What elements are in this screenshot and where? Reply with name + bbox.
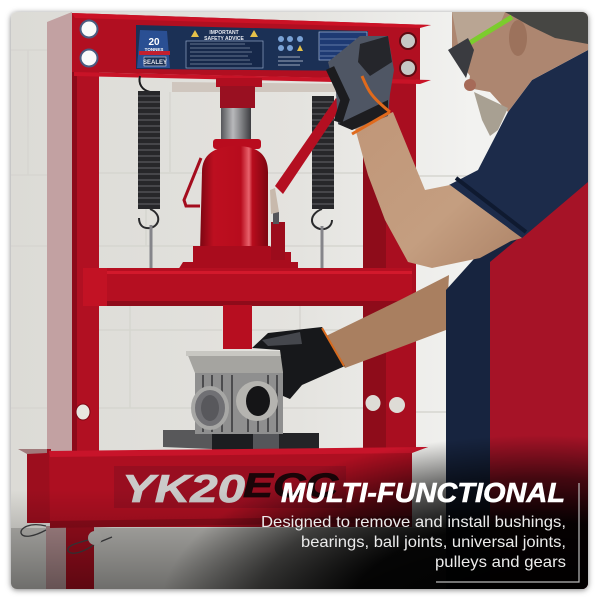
workpiece base blocks bbox=[163, 430, 319, 451]
press ram lower bbox=[223, 305, 252, 349]
left spring bbox=[138, 76, 160, 272]
retaining pins bbox=[21, 525, 112, 553]
safety label panel: 20 bbox=[148, 37, 160, 48]
caption body text: Designed to remove and install bushings, bbox=[261, 514, 566, 531]
caption bracket line bbox=[436, 483, 579, 582]
safety label panel: SEALEY bbox=[143, 60, 167, 66]
caption body text bbox=[261, 514, 566, 571]
model decal: YK20 bbox=[122, 468, 245, 511]
engine cylinder workpiece bbox=[186, 351, 284, 434]
caption body text: pulleys and gears bbox=[435, 554, 566, 571]
right spring bbox=[312, 96, 334, 272]
caption body text: bearings, ball joints, universal joints, bbox=[301, 534, 566, 551]
press frame: right post bbox=[363, 78, 416, 448]
bolts bbox=[80, 20, 416, 76]
safety label panel: IMPORTANT bbox=[209, 30, 239, 36]
model decal bbox=[114, 466, 346, 511]
caption heading: MULTI-FUNCTIONAL bbox=[281, 477, 565, 508]
operator: head bbox=[448, 12, 588, 136]
upper arm bbox=[355, 112, 522, 268]
pump handle bbox=[275, 98, 342, 194]
operator: navy shirt and red apron bbox=[446, 50, 588, 589]
press frame: top beam bbox=[72, 13, 431, 92]
press frame: left post bbox=[46, 12, 99, 589]
breeze block wall bbox=[11, 12, 508, 589]
safety label panel: SAFETY ADVICE bbox=[204, 36, 245, 42]
lower forearm bbox=[326, 275, 449, 368]
lower glove bbox=[252, 327, 345, 399]
upper glove bbox=[328, 36, 394, 134]
bottle jack bbox=[178, 86, 299, 272]
safety label panel bbox=[136, 25, 368, 71]
press frame: bottom beam bbox=[18, 447, 428, 528]
safety label panel: TONNES bbox=[145, 47, 163, 52]
model decal: ECC bbox=[243, 467, 339, 505]
press frame: middle crossbeam bbox=[83, 268, 412, 306]
bottom dark vignette bbox=[11, 438, 588, 589]
